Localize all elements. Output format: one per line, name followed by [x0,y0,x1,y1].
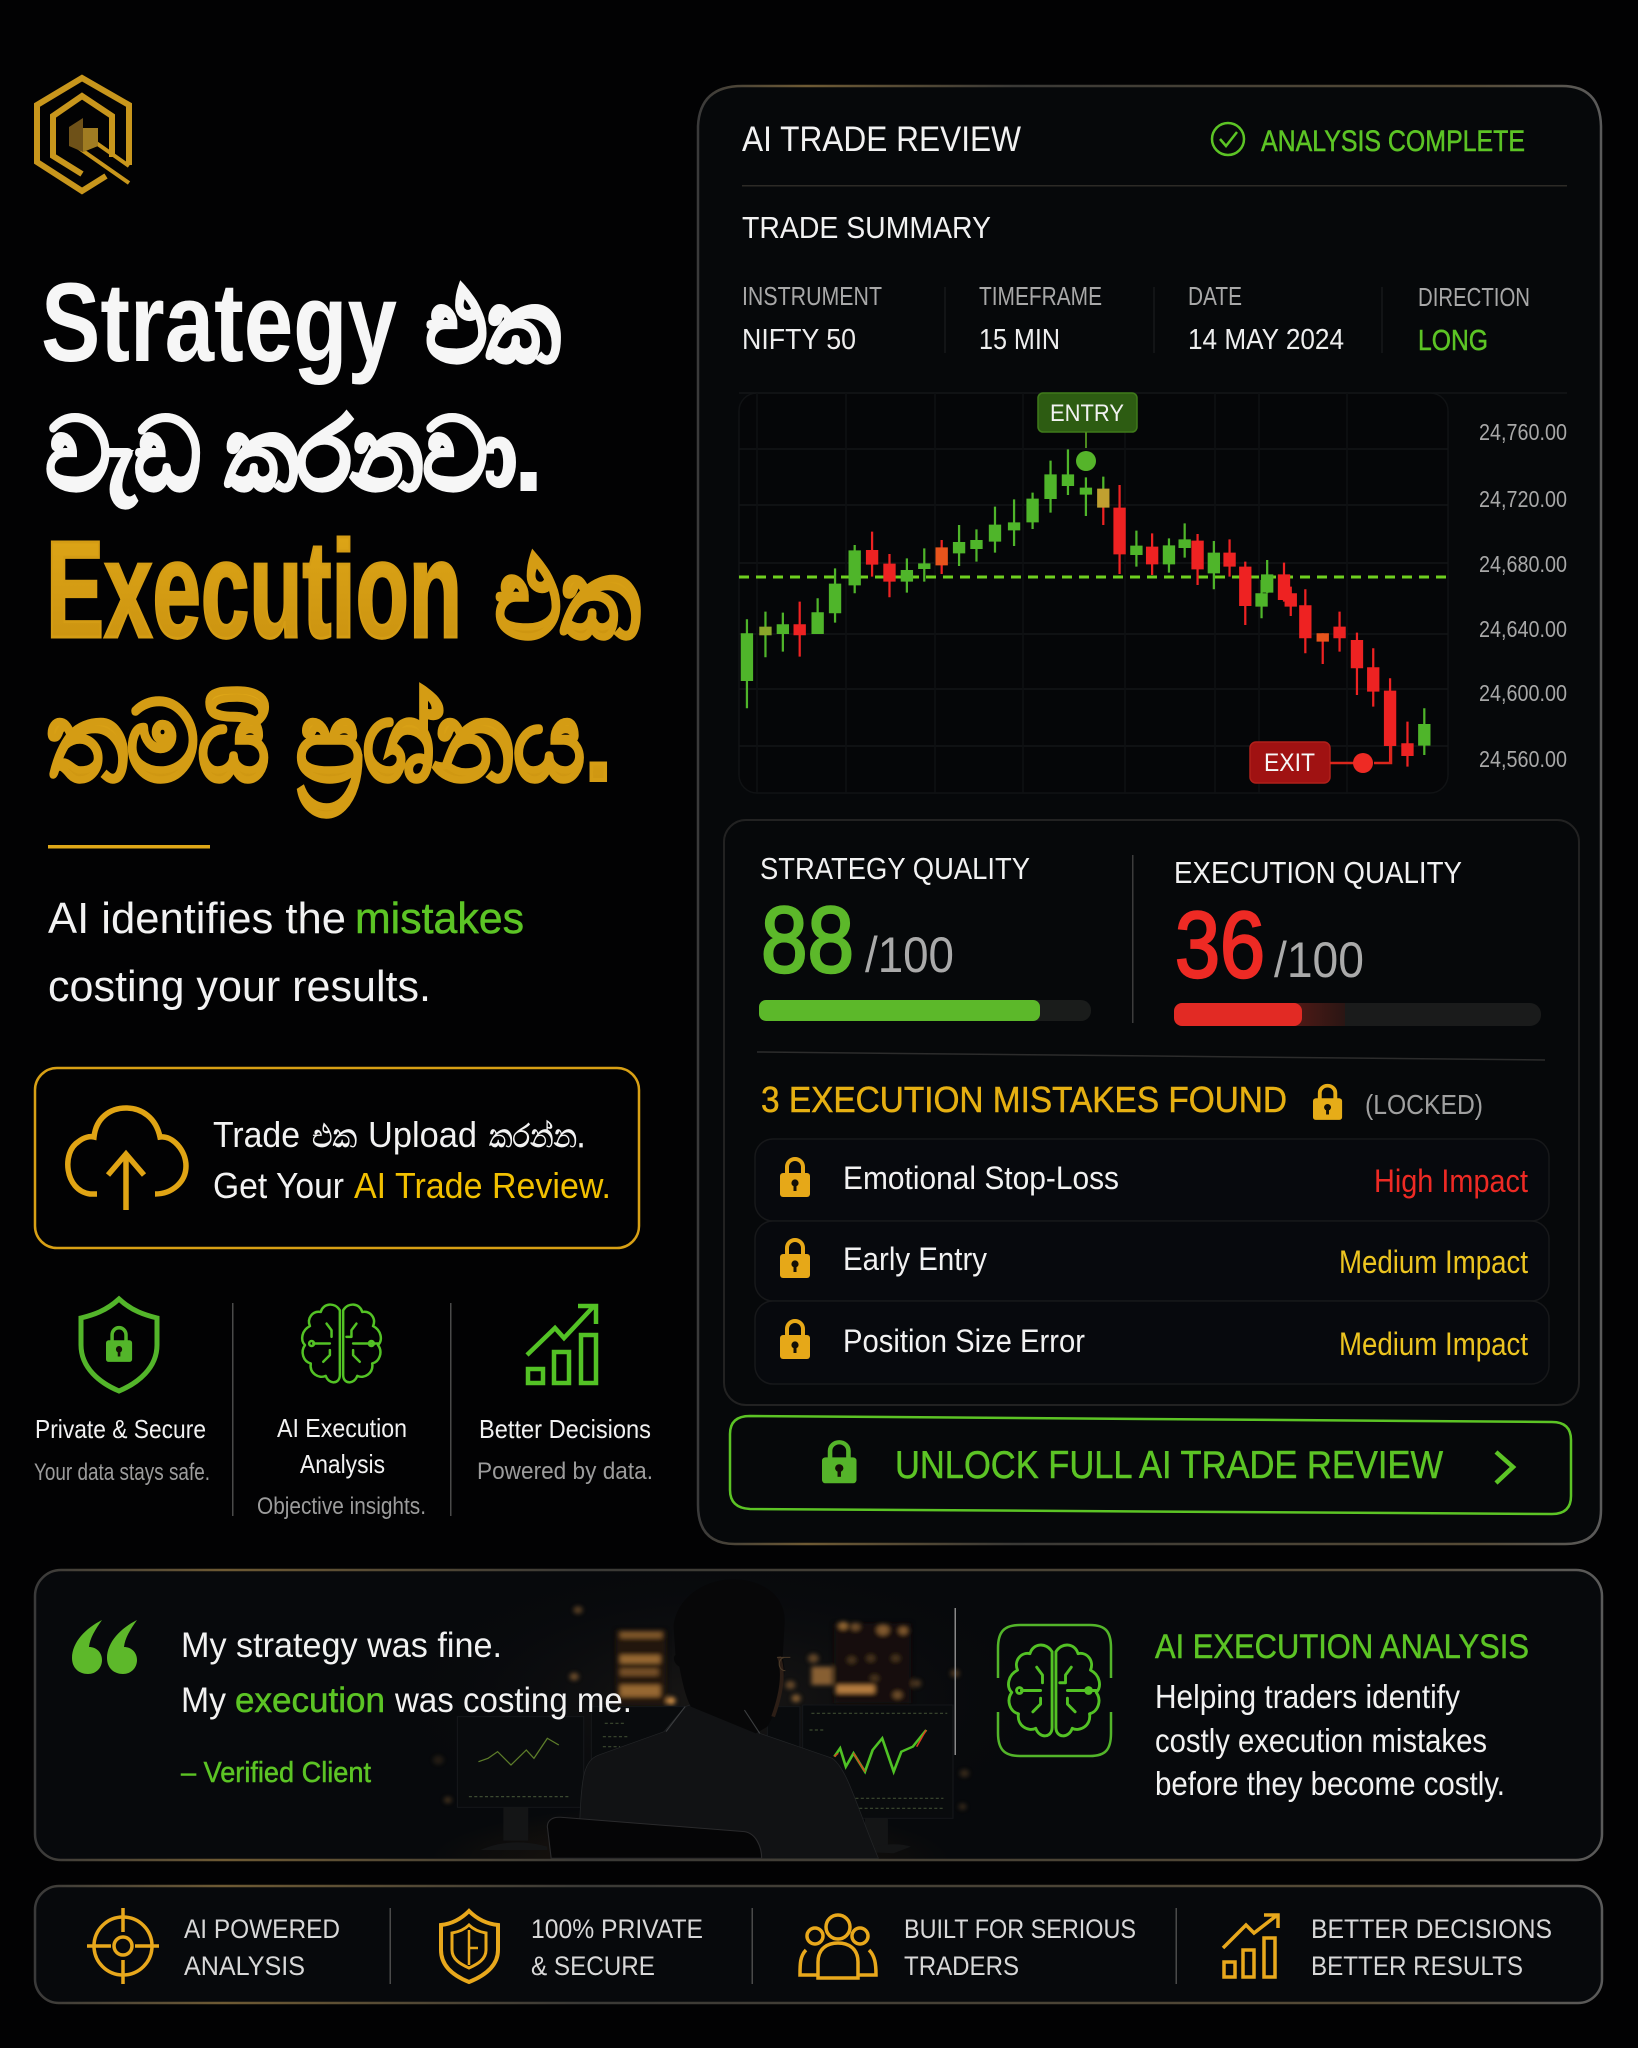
trade summary: DATE [1188,281,1242,311]
item: private and secure: & SECURE [531,1951,655,1981]
subheading: AI identifies the [48,894,346,943]
price axis labels: 24,680.00 [1479,551,1567,577]
mistake row: emotional stop-loss [755,1139,1549,1221]
feature: AI execution analysis: AI Execution [277,1413,407,1443]
subheading: mistakes [355,894,524,943]
exit marker [1250,742,1391,783]
photo: trader at monitors [432,1604,970,1859]
trade summary: DIRECTION [1418,282,1530,312]
client quote: My strategy was fine. [181,1626,502,1665]
item: private and secure: 100% PRIVATE [531,1914,703,1944]
status: analysis complete: ANALYSIS COMPLETE [1261,125,1525,158]
trade summary: LONG [1418,325,1488,357]
feature: AI execution analysis [257,1305,426,1520]
unlock button: UNLOCK FULL AI TRADE REVIEW [895,1444,1443,1487]
status: analysis complete [1212,123,1525,158]
mistake row: early entry: Medium Impact [1339,1244,1528,1280]
unlock button [730,1416,1571,1514]
mistake row: emotional stop-loss: High Impact [1374,1163,1528,1199]
client quote: My [181,1681,226,1720]
exit marker: EXIT [1264,749,1315,777]
mistake row: position size error: Position Size Error [843,1323,1085,1359]
client quote [181,1626,632,1789]
feature: private and secure [34,1299,210,1486]
headline: තමයි ප්‍රශ්නය. [47,681,612,817]
item: private and secure [441,1911,703,1982]
AI execution analysis text: Helping traders identify [1155,1678,1460,1715]
upload call to action: කරන්න. [489,1118,585,1154]
client quote: – Verified Client [181,1757,371,1789]
execution quality score: /100 [1274,932,1364,988]
panel: testimonial [35,1570,1602,1860]
feature: better decisions: Better Decisions [479,1414,651,1444]
candlestick chart [739,393,1567,793]
client quote: execution [235,1681,385,1720]
mistake row: early entry [755,1221,1549,1301]
entry price dashed line [739,576,1448,578]
item: AI powered analysis: ANALYSIS [184,1951,305,1981]
trade summary [742,210,1530,357]
upload call to action: Get Your [213,1165,344,1206]
item: built for serious traders: TRADERS [904,1951,1019,1981]
trade summary: 15 MIN [979,324,1060,356]
feature: private and secure: Private & Secure [35,1414,206,1444]
upload call to action [35,1068,639,1248]
monitors [457,1705,953,1818]
client quote: was costing me. [394,1681,632,1720]
headline: Execution [46,513,462,667]
mistake row: emotional stop-loss: Emotional Stop-Loss [843,1160,1119,1196]
headline: වැඩ කරනවා. [46,399,541,511]
feature: better decisions [477,1306,653,1485]
entry marker [1038,393,1137,471]
feature divider [232,1303,234,1516]
trade summary: TIMEFRAME [979,281,1102,311]
item: built for serious traders [800,1914,1136,1981]
icon: growth chart [527,1306,596,1383]
feature: private and secure: Your data stays safe. [34,1459,210,1486]
headline: Strategy [41,260,397,385]
icon: quotation mark [72,1620,137,1674]
item: AI powered analysis [87,1908,340,1984]
icon: target [87,1908,159,1984]
AI execution analysis text [1155,1628,1529,1802]
price axis labels: 24,560.00 [1479,746,1567,772]
item: AI powered analysis: AI POWERED [184,1914,340,1944]
item: better decisions better results: BETTER RESULTS [1311,1951,1523,1981]
execution quality score: 36 [1175,892,1265,997]
icon: growth chart [1223,1915,1278,1977]
price axis labels: 24,720.00 [1479,486,1567,512]
logo [37,78,129,191]
bottom trust strip [35,1886,1602,2003]
icon: shield with lock [81,1299,157,1391]
headline: එක [426,271,560,383]
icon: shield [441,1911,498,1982]
monitor charts [469,1713,947,1808]
trade summary: NIFTY 50 [742,324,856,356]
trade summary: TRADE SUMMARY [742,210,991,245]
upload call to action: Trade [213,1114,300,1155]
mistakes heading: (LOCKED) [1365,1089,1483,1120]
trade summary: 14 MAY 2024 [1188,324,1344,356]
strategy quality score: /100 [865,927,954,983]
strategy quality score: 88 [761,887,854,992]
subheading [48,894,524,1011]
icon: brain in frame [998,1625,1111,1756]
item: better decisions better results: BETTER DECISIONS [1311,1914,1552,1944]
headline: එක [495,538,640,661]
price axis labels: 24,640.00 [1479,616,1567,642]
icon: cloud upload [68,1108,186,1210]
panel: AI trade review [698,86,1601,1544]
feature divider [450,1303,452,1516]
feature: better decisions: Powered by data. [477,1458,653,1485]
subheading: costing your results. [48,962,431,1011]
execution quality score [1174,855,1541,1026]
mistake row: early entry: Early Entry [843,1241,987,1277]
price axis labels [1479,419,1567,772]
AI execution analysis text: before they become costly. [1155,1765,1505,1802]
trade summary: INSTRUMENT [742,281,882,311]
monitor stands [480,1807,911,1853]
panel heading: AI TRADE REVIEW [742,120,1021,159]
entry marker: ENTRY [1050,400,1124,427]
item: built for serious traders: BUILT FOR SERIOUS [904,1914,1136,1944]
execution quality score: EXECUTION QUALITY [1174,855,1462,890]
candles [747,449,1424,767]
upload call to action: Upload [368,1114,477,1155]
feature: AI execution analysis: Objective insights. [257,1493,426,1520]
AI execution analysis text: costly execution mistakes [1155,1722,1487,1759]
price axis labels: 24,600.00 [1479,680,1567,706]
mistakes heading: 3 EXECUTION MISTAKES FOUND [761,1079,1287,1120]
gold divider [48,845,210,848]
mistake row: position size error [755,1301,1549,1384]
headline [41,260,640,817]
strategy quality score: STRATEGY QUALITY [760,851,1030,886]
upload call to action: එක [312,1118,357,1154]
upload call to action: AI Trade Review. [354,1165,611,1206]
mistake row: position size error: Medium Impact [1339,1326,1528,1362]
AI execution analysis text: AI EXECUTION ANALYSIS [1155,1628,1529,1666]
price axis labels: 24,760.00 [1479,419,1567,445]
item: better decisions better results [1223,1914,1552,1981]
quality scores and mistakes panel [724,820,1579,1405]
icon: brain [302,1305,381,1382]
icon: people [800,1915,876,1978]
feature: AI execution analysis: Analysis [300,1449,385,1479]
strategy quality score [759,851,1091,1021]
trader silhouette [565,1703,878,1858]
